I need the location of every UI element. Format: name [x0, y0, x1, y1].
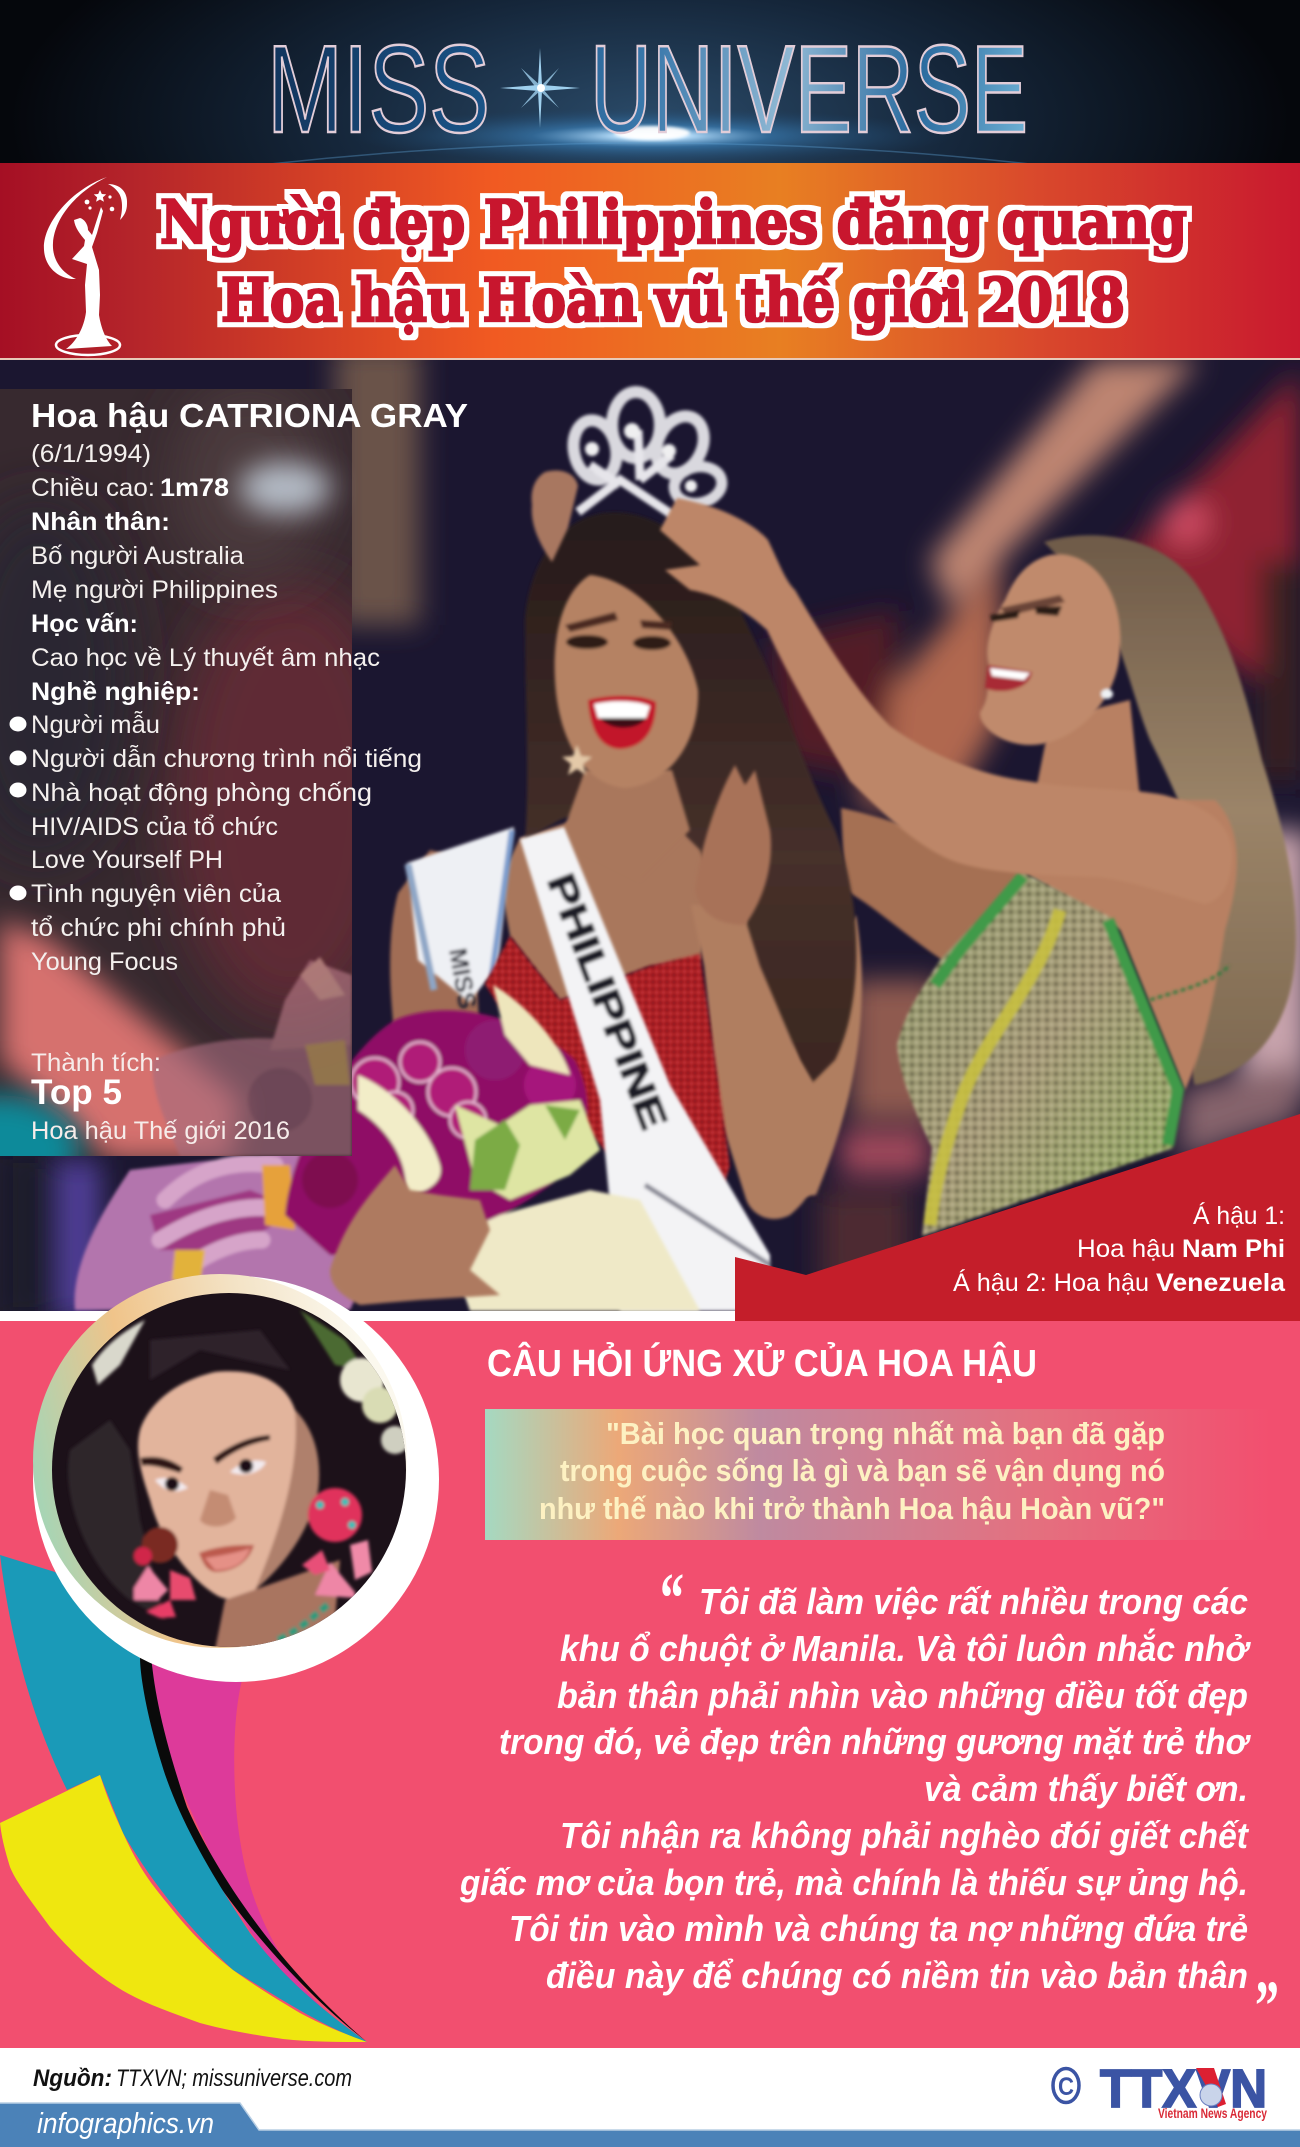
right earring	[302, 1488, 372, 1598]
woman in the centre: hair	[525, 512, 856, 1085]
icon: star	[500, 48, 580, 128]
biography text	[31, 440, 422, 976]
biography text: tổ chức phi chính phủ	[31, 914, 286, 942]
woman on the right: face	[980, 554, 1120, 745]
raised arm of the woman on the right	[658, 496, 1182, 876]
panel: coronation photo	[0, 345, 1300, 1320]
answer quote: điều này để chúng có niềm tin vào bản thân	[546, 1955, 1248, 1996]
biography text: Học vấn:	[31, 610, 138, 638]
decorative ribbons	[0, 1555, 367, 2042]
biography text: Bố người Australia	[31, 542, 244, 570]
light spot in photo	[239, 462, 331, 514]
biography text: Tình nguyện viên của	[31, 880, 281, 908]
necklace	[278, 1603, 330, 1640]
woman in the centre: face	[555, 575, 698, 788]
woman in the centre: forearm and neck	[560, 770, 830, 1219]
bouquet	[75, 985, 700, 1311]
left earring	[134, 1527, 196, 1618]
achievement: Top 5	[31, 1073, 122, 1112]
biography text: 1m78	[160, 474, 229, 502]
panel: runners-up callout: Á hậu 2: Hoa hậu	[953, 1268, 1149, 1297]
answer quote	[459, 1558, 1279, 2046]
woman in the centre: arms and chest	[388, 820, 864, 1198]
biography text: Chiều cao:	[31, 474, 155, 502]
footer blue bar	[0, 2103, 1300, 2147]
biography text: Nhà hoạt động phòng chống	[31, 779, 372, 807]
TTXVN logo: TTXVN	[1100, 2059, 1267, 2119]
biography text: HIV/AIDS của tổ chức	[31, 813, 278, 841]
white divider strip	[0, 1311, 736, 1322]
answer quote: và cảm thấy biết ơn.	[924, 1768, 1248, 1809]
question box: trong cuộc sống là gì và bạn sẽ vận dụng nó	[560, 1453, 1165, 1488]
biography text: Cao học về Lý thuyết âm nhạc	[31, 644, 380, 672]
title: Hoa hậu Hoàn vũ thế giới 2018	[221, 266, 1125, 336]
answer quote: khu ổ chuột ở Manila. Và tôi luôn nhắc nhở	[560, 1627, 1252, 1669]
crown	[568, 392, 725, 520]
panel: runners-up callout	[735, 1114, 1300, 1321]
answer quote: giấc mơ của bọn trẻ, mà chính là thiếu sự ủng hộ.	[459, 1862, 1248, 1903]
photo background lights	[0, 345, 1300, 1320]
left sash: MISS	[443, 946, 481, 1011]
Philippines sash	[520, 827, 770, 1311]
biography text: (6/1/1994)	[31, 440, 151, 468]
answer quote: Tôi tin vào mình và chúng ta nợ những đứa trẻ	[509, 1908, 1248, 1949]
achievement: Thành tích:	[31, 1049, 161, 1077]
source: TTXVN; missuniverse.com	[116, 2065, 352, 2092]
biography text: Mẹ người Philippines	[31, 576, 278, 604]
question box: "Bài học quan trọng nhất mà bạn đã gặp	[606, 1416, 1165, 1451]
title	[160, 188, 1187, 336]
woman on the right: torso and second arm	[841, 700, 1237, 1090]
portrait photo	[52, 1293, 409, 1650]
achievement: Hoa hậu Thế giới 2016	[31, 1117, 290, 1145]
name heading: Hoa hậu CATRIONA GRAY	[31, 397, 468, 434]
opening quotation mark: “	[660, 1558, 684, 1638]
source: Nguồn:	[33, 2065, 112, 2092]
biography text: Young Focus	[31, 948, 178, 976]
answer quote: Tôi nhận ra không phải nghèo đói giết chết	[560, 1815, 1250, 1856]
achievement	[31, 1049, 290, 1145]
TTXVN logo: C	[1058, 2073, 1074, 2101]
logo wordmark	[267, 21, 1028, 159]
answer quote: Tôi đã làm việc rất nhiều trong các	[699, 1581, 1248, 1622]
answer quote: bản thân phải nhìn vào những điều tốt đẹp	[557, 1675, 1248, 1716]
panel: runners-up callout: Nam Phi	[1182, 1235, 1285, 1263]
panel: title band	[0, 163, 1300, 360]
panel: runners-up callout: Hoa hậu	[1077, 1235, 1175, 1263]
website: infographics.vn	[37, 2108, 214, 2140]
panel: runners-up callout: Á hậu 1:	[1193, 1201, 1285, 1230]
washed flowers behind panel	[153, 957, 352, 1156]
hand at the hair	[695, 765, 771, 925]
portrait with ring	[33, 1274, 439, 1682]
red sequin dress	[485, 936, 730, 1208]
heading: interview question: CÂU HỎI ỨNG XỬ CỦA HOA HẬU	[487, 1341, 1037, 1385]
biography text: Nghề nghiệp:	[31, 678, 200, 706]
biography text: Người dẫn chương trình nổi tiếng	[31, 744, 422, 773]
logo wordmark: UNIVERSE	[590, 21, 1028, 159]
Philippines sash: PHILIPPINE	[539, 868, 675, 1135]
left sash	[407, 827, 514, 1011]
panel: biography overlay	[0, 380, 468, 1205]
biography text: Love Yourself PH	[31, 846, 223, 874]
question box: như thế nào khi trở thành Hoa hậu Hoàn vũ?"	[539, 1491, 1165, 1526]
biography text: Người mẫu	[31, 710, 160, 739]
panel: runners-up callout: Venezuela	[1156, 1269, 1286, 1297]
hand on the crown	[532, 471, 578, 562]
icon: Miss Universe statuette	[44, 177, 127, 355]
panel: Miss Universe header	[0, 0, 1300, 164]
title: Người đẹp Philippines đăng quang	[160, 188, 1187, 258]
closing quotation mark: ”	[1255, 1966, 1279, 2046]
question box	[485, 1409, 1270, 1540]
hand holding bouquet	[330, 1165, 500, 1305]
bullet points	[10, 716, 26, 900]
woman on the right: hair	[1044, 535, 1296, 1085]
source	[33, 2065, 352, 2092]
answer quote: trong đó, vẻ đẹp trên những gương mặt trẻ thơ	[499, 1721, 1252, 1762]
biography text: Nhân thân:	[31, 508, 170, 536]
panel: interview section background	[0, 1321, 1300, 2048]
logo wordmark: MISS	[267, 21, 490, 159]
footer	[0, 2048, 1300, 2147]
woman on the right: mesh dress	[897, 872, 1230, 1236]
